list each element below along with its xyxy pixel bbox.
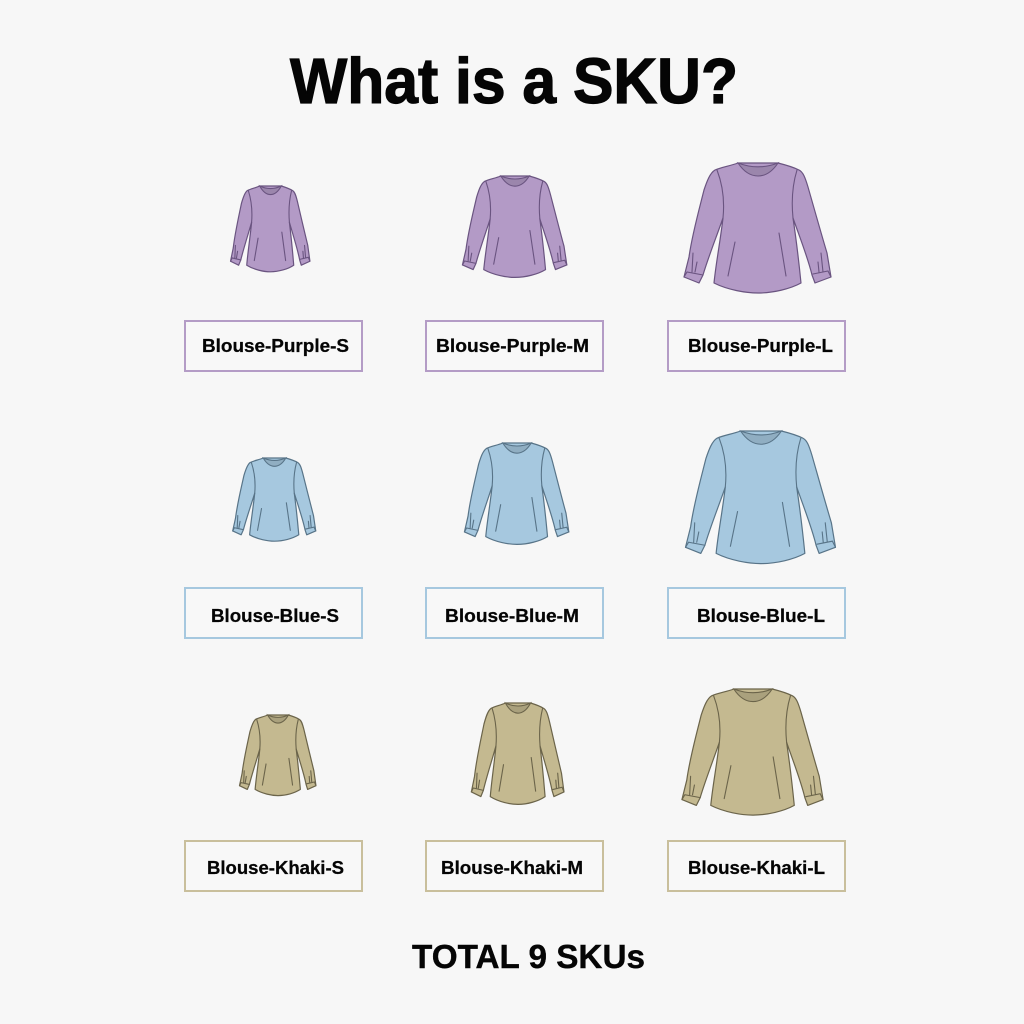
- icon: khaki blouse large: [682, 689, 823, 815]
- label: Blouse-Purple-S: [185, 321, 362, 371]
- label: Blouse-Purple-S: Blouse-Purple-S: [202, 336, 349, 356]
- label: Blouse-Purple-L: Blouse-Purple-L: [688, 336, 833, 356]
- label: Blouse-Khaki-S: [185, 841, 362, 891]
- label: Blouse-Blue-S: [185, 588, 362, 638]
- icon: khaki blouse medium: [471, 703, 564, 804]
- icon: blue blouse large: [686, 431, 835, 564]
- icon: purple blouse small: [231, 186, 310, 272]
- label: Blouse-Purple-M: [426, 321, 603, 371]
- label: Blouse-Khaki-L: Blouse-Khaki-L: [688, 858, 825, 878]
- label: Blouse-Khaki-M: Blouse-Khaki-M: [441, 858, 583, 878]
- label: Blouse-Blue-L: [668, 588, 845, 638]
- label: Blouse-Purple-L: [668, 321, 845, 371]
- row: blue blouses: [185, 431, 845, 638]
- label: Blouse-Purple-M: Blouse-Purple-M: [436, 336, 589, 356]
- row: purple blouses: [185, 163, 845, 371]
- title: What is a SKU?: [290, 45, 738, 117]
- icon: blue blouse small: [233, 458, 316, 541]
- icon: purple blouse medium: [462, 176, 567, 277]
- icon: purple blouse large: [684, 163, 831, 293]
- label: Blouse-Blue-M: [426, 588, 603, 638]
- label: Blouse-Blue-S: Blouse-Blue-S: [211, 606, 339, 626]
- label: Blouse-Khaki-L: [668, 841, 845, 891]
- label: Blouse-Blue-L: Blouse-Blue-L: [697, 606, 825, 626]
- label: Blouse-Blue-M: Blouse-Blue-M: [445, 606, 579, 626]
- label: Blouse-Khaki-M: [426, 841, 603, 891]
- label: Blouse-Khaki-S: Blouse-Khaki-S: [207, 858, 344, 878]
- icon: khaki blouse small: [240, 715, 316, 796]
- total: TOTAL 9 SKUs: [412, 939, 645, 976]
- row: khaki blouses: [185, 689, 845, 891]
- icon: blue blouse medium: [464, 443, 569, 544]
